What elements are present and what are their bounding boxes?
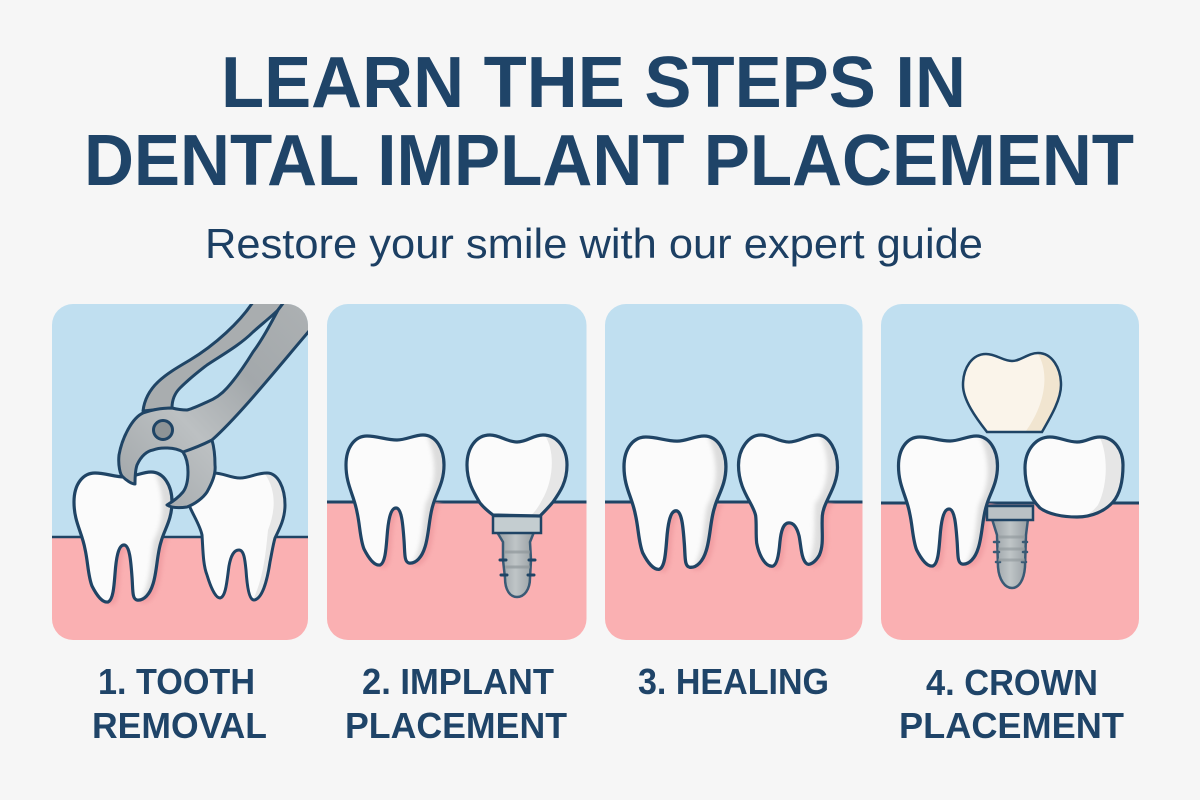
icon: extracted tooth <box>74 470 178 605</box>
icon: implant with crown <box>467 435 567 597</box>
icon: adjacent crown <box>1025 437 1123 517</box>
icon: neighbouring tooth <box>189 473 285 600</box>
icon: floating crown <box>963 353 1061 432</box>
title: DENTAL IMPLANT PLACEMENT <box>84 121 1134 201</box>
icon: dental forceps <box>119 302 312 508</box>
icon: forceps pivot <box>154 420 172 440</box>
label: step 4 <box>899 662 1124 746</box>
panel: step 4 crown placement <box>881 304 1139 640</box>
icon: natural tooth <box>346 433 450 568</box>
label: step 2 <box>345 661 567 746</box>
icon: implant post <box>987 506 1033 588</box>
label: step 1 <box>92 661 267 746</box>
icon: natural tooth <box>624 434 732 572</box>
label: step 2: 2. IMPLANT <box>362 661 554 702</box>
label: step 4: PLACEMENT <box>899 705 1124 746</box>
icon: healed implant tooth <box>738 433 844 569</box>
panel: step 2 implant placement <box>327 304 587 640</box>
panel: step 1 tooth removal <box>52 302 312 640</box>
icon: natural tooth <box>898 434 1004 569</box>
label: step 4: 4. CROWN <box>926 662 1098 703</box>
label: step 1: REMOVAL <box>92 705 267 746</box>
label: step 1: 1. TOOTH <box>98 661 255 702</box>
panel: step 3 healing <box>605 304 863 640</box>
subtitle: Restore your smile with our expert guide <box>205 220 983 267</box>
label: step 3: 3. HEALING <box>638 661 829 702</box>
title: LEARN THE STEPS IN <box>221 43 966 123</box>
label: step 2: PLACEMENT <box>345 705 567 746</box>
title <box>84 43 1134 201</box>
